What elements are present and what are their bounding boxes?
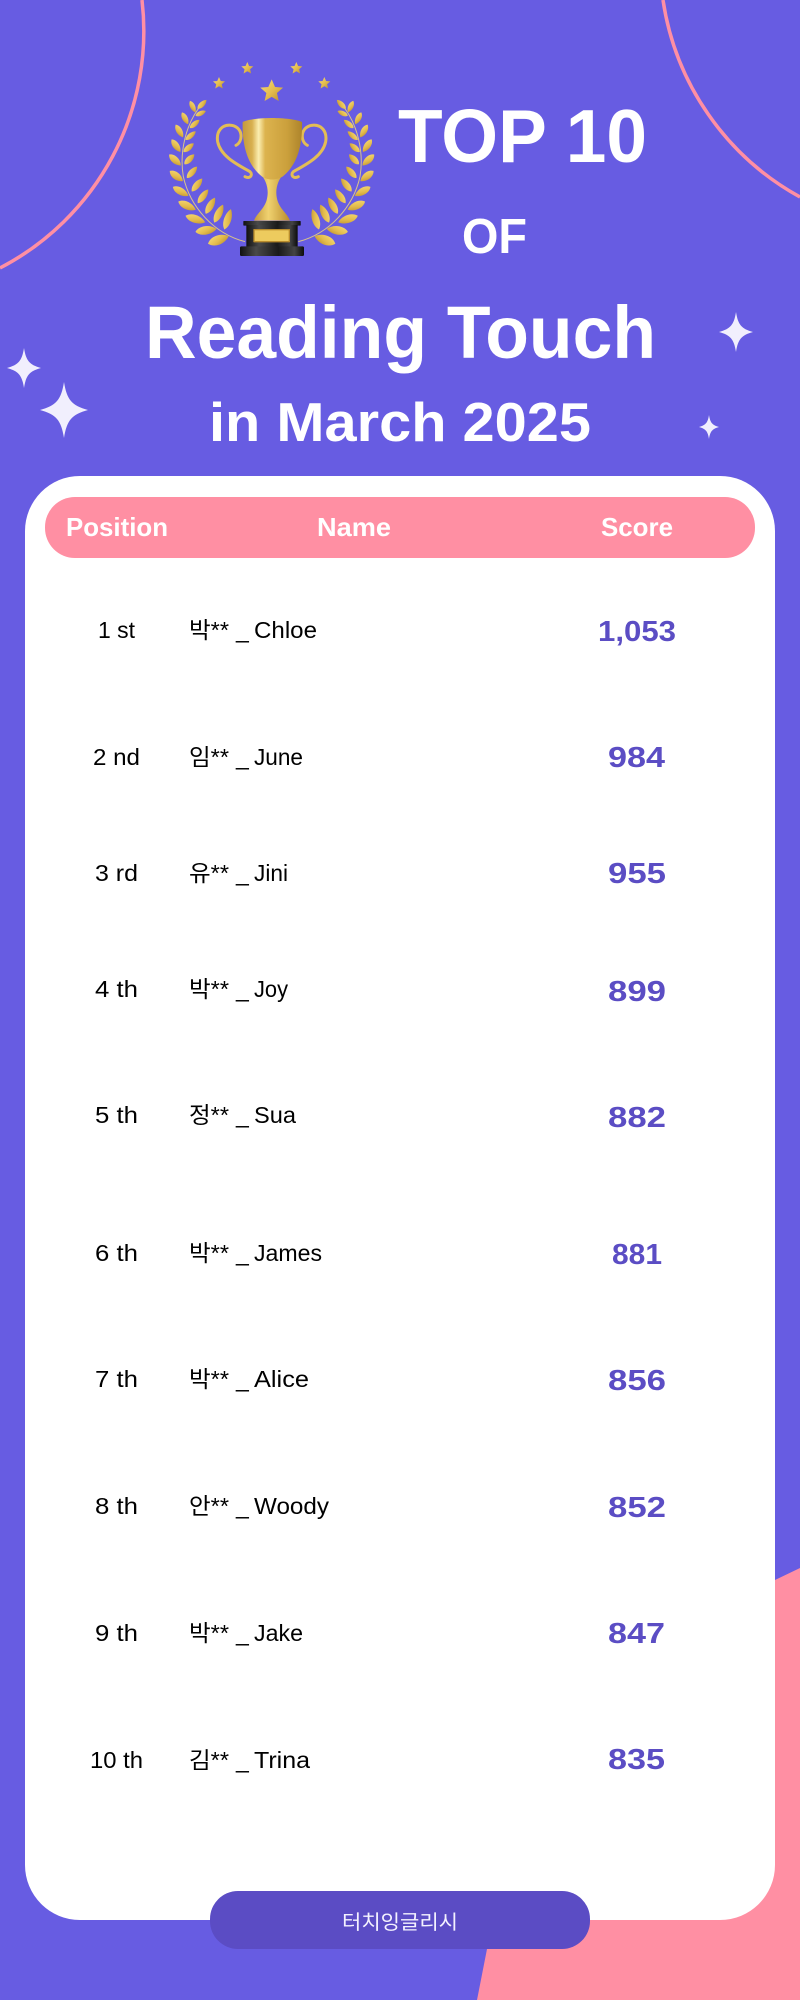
row 5: _ <box>235 1102 250 1128</box>
row 1: 1 st <box>98 617 135 643</box>
row 2 <box>93 742 665 774</box>
row 10: 835 <box>608 1744 665 1776</box>
decorative pink corner shape <box>477 1568 800 2000</box>
row 3: 955 <box>608 858 666 890</box>
panel: leaderboard card <box>25 476 775 1920</box>
left laurel branch <box>167 98 245 248</box>
row 3: 유** <box>189 860 229 886</box>
row 9: 박** <box>189 1620 229 1646</box>
row 7: 7 th <box>95 1366 138 1392</box>
title: OF: OF <box>462 210 527 264</box>
row 7: 856 <box>608 1365 666 1397</box>
row 1 <box>98 616 676 648</box>
row 8: Woody <box>254 1493 330 1519</box>
row 2: 임** <box>189 744 229 770</box>
title: TOP 10: TOP 10 <box>398 94 647 178</box>
header: Position: Position <box>66 512 168 542</box>
sparkle decorations <box>7 312 753 439</box>
icon: gold trophy with laurel wreath and stars <box>167 62 377 256</box>
row 6 <box>95 1239 662 1271</box>
row 9 <box>95 1618 665 1650</box>
row 6: James <box>254 1240 322 1266</box>
row 6: 881 <box>612 1239 662 1271</box>
row 2: 2 nd <box>93 744 140 770</box>
row 5: Sua <box>254 1102 296 1128</box>
row 7: _ <box>235 1366 250 1392</box>
row 2: June <box>254 744 303 770</box>
right arc line <box>663 0 800 197</box>
row 1: _ <box>235 617 250 643</box>
row 6: 박** <box>189 1240 229 1266</box>
row 6: _ <box>235 1240 250 1266</box>
row 1: Chloe <box>254 617 317 643</box>
trophy cup <box>243 118 302 179</box>
row 8: 안** <box>189 1493 229 1519</box>
row 2: _ <box>235 744 250 770</box>
row 3: Jini <box>254 860 288 886</box>
row 1: 1,053 <box>598 616 676 648</box>
row 4: Joy <box>254 976 288 1002</box>
row 5: 정** <box>189 1102 229 1128</box>
row 3: _ <box>235 860 250 886</box>
row 9: 847 <box>608 1618 665 1650</box>
row 4: 899 <box>608 976 666 1008</box>
row 3 <box>95 858 666 890</box>
table header bar <box>45 497 755 558</box>
row 7 <box>95 1365 666 1397</box>
row 8: _ <box>235 1493 250 1519</box>
right laurel branch <box>298 98 377 248</box>
row 3: 3 rd <box>95 860 138 886</box>
row 10: Trina <box>254 1747 310 1773</box>
row 4: 박** <box>189 976 229 1002</box>
title: Reading Touch: Reading Touch <box>145 291 656 374</box>
row 4: _ <box>235 976 250 1002</box>
trophy base <box>240 221 304 256</box>
title: in March 2025: in March 2025 <box>209 391 591 453</box>
row 5: 882 <box>608 1102 666 1134</box>
trophy handles <box>217 125 326 177</box>
row 5: 5 th <box>95 1102 138 1128</box>
trophy stem <box>254 173 290 221</box>
header: Name: Name <box>317 512 391 542</box>
footer pill: 터치잉글리시: 터치잉글리시 <box>342 1911 458 1934</box>
row 1: 박** <box>189 617 229 643</box>
row 6: 6 th <box>95 1240 138 1266</box>
row 9: Jake <box>254 1620 303 1646</box>
stars <box>213 62 330 101</box>
footer pill: 터치잉글리시 <box>210 1891 590 1949</box>
row 8: 852 <box>608 1492 666 1524</box>
row 4 <box>95 976 666 1008</box>
row 10: 10 th <box>90 1747 143 1773</box>
row 2: 984 <box>608 742 665 774</box>
row 7: 박** <box>189 1366 229 1392</box>
row 8 <box>95 1492 666 1524</box>
row 5 <box>95 1102 666 1134</box>
row 8: 8 th <box>95 1493 138 1519</box>
left arc line <box>0 0 144 268</box>
row 4: 4 th <box>95 976 138 1002</box>
row 10 <box>90 1744 665 1776</box>
row 9: 9 th <box>95 1620 138 1646</box>
row 9: _ <box>235 1620 250 1646</box>
row 10: 김** <box>189 1747 229 1773</box>
row 10: _ <box>235 1747 250 1773</box>
header: Score: Score <box>601 512 673 542</box>
row 7: Alice <box>254 1366 309 1392</box>
